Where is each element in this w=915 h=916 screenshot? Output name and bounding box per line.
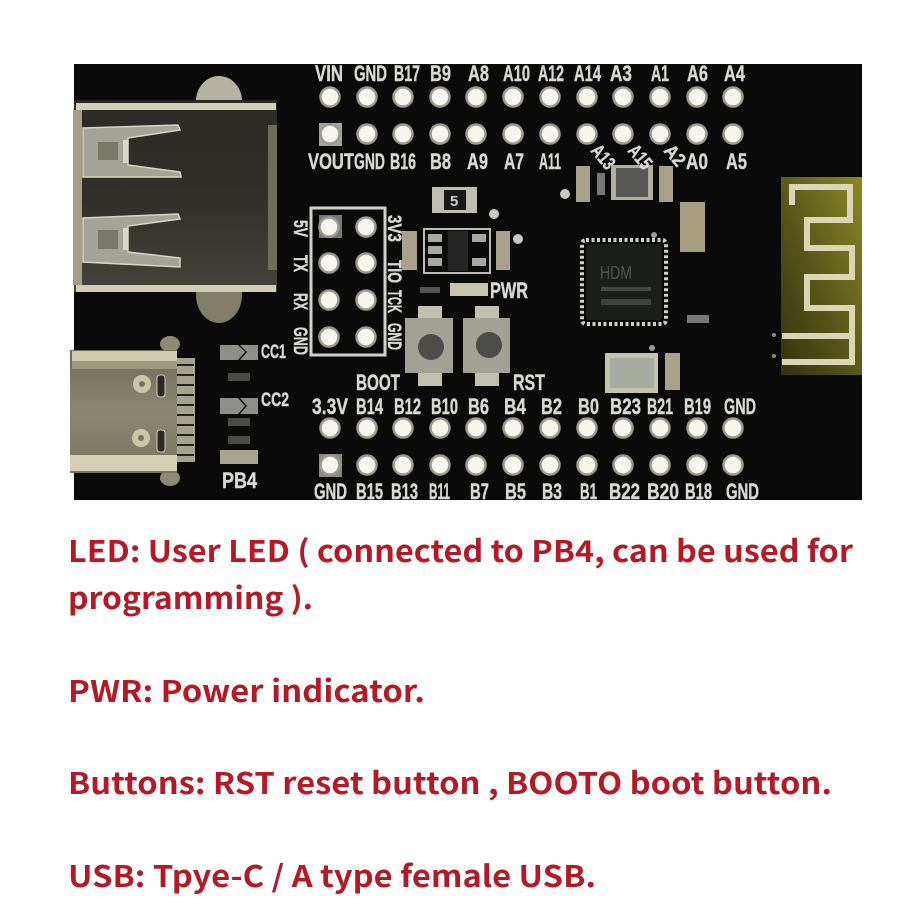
pin labels: 3V3 <box>383 215 404 242</box>
pin labels: B7 <box>470 479 489 504</box>
pin labels: GND <box>314 479 347 504</box>
circuit board <box>70 61 862 504</box>
USB A connector <box>73 76 277 323</box>
microcontroller <box>582 240 666 324</box>
antenna <box>772 177 862 375</box>
LED note: LED: User LED ( connected to PB4, can be used for <box>68 527 854 571</box>
header pin holes: top and bottom rows <box>319 88 742 477</box>
pin labels: RST <box>513 370 545 395</box>
pin labels: A7 <box>504 149 524 174</box>
pin labels: B16 <box>390 149 416 174</box>
board background <box>74 64 862 500</box>
pin labels: B18 <box>685 479 712 504</box>
pin labels: B21 <box>647 394 673 419</box>
pin labels: B6 <box>468 394 489 419</box>
pin labels: VIN <box>315 61 343 86</box>
pin labels: A9 <box>467 149 488 174</box>
pin labels: B2 <box>541 394 562 419</box>
microcontroller: HDM <box>600 263 632 283</box>
pin labels: VOUT <box>308 149 354 174</box>
header pins <box>319 215 376 346</box>
pin labels: A0 <box>686 149 708 174</box>
pin labels: PWR <box>490 278 528 303</box>
pin labels: B13 <box>391 479 418 504</box>
pin labels: A4 <box>724 61 746 86</box>
header outline <box>311 208 385 355</box>
pin labels: A2 <box>659 141 689 171</box>
pin labels: B0 <box>578 394 599 419</box>
pin labels: B23 <box>610 394 641 419</box>
pin labels: GND <box>383 323 404 350</box>
pin labels: A11 <box>539 149 561 174</box>
pin labels: TX <box>289 255 310 272</box>
USB note: USB: Tpye-C / A type female USB. <box>68 852 596 896</box>
pin labels: BOOT <box>356 370 400 395</box>
BOOT button <box>405 306 453 386</box>
pin labels: B14 <box>356 394 384 419</box>
pin labels: 5V <box>289 220 310 237</box>
regulator and resistors <box>402 187 510 296</box>
pin labels: B5 <box>505 479 526 504</box>
LED note <box>68 527 854 618</box>
pin labels: B15 <box>356 479 383 504</box>
pin labels: A15 <box>623 141 656 174</box>
PWR note: PWR: Power indicator. <box>68 667 425 711</box>
pin labels <box>222 61 759 504</box>
pin labels: GND <box>354 61 387 86</box>
pin labels: CC2 <box>261 390 289 411</box>
pin labels: A3 <box>610 61 632 86</box>
pin labels: B12 <box>394 394 421 419</box>
pin labels: A6 <box>687 61 708 86</box>
pin labels: A1 <box>651 61 669 86</box>
pin labels: B20 <box>647 479 679 504</box>
pin labels: CC1 <box>261 342 286 363</box>
buttons note: Buttons: RST reset button , BOOTO boot button. <box>68 759 832 803</box>
pin labels: GND <box>726 479 759 504</box>
pin labels: GND <box>289 327 310 355</box>
pin labels: B3 <box>542 479 562 504</box>
CC and PB4 LEDs <box>220 345 258 464</box>
small chip and crystals <box>489 165 709 393</box>
pin labels: B17 <box>394 61 420 86</box>
pin labels: RX <box>289 293 310 310</box>
pin labels: A13 <box>586 141 619 174</box>
pin labels: A5 <box>726 149 747 174</box>
RST button <box>463 306 510 386</box>
regulator and resistors: 5 <box>450 193 458 210</box>
pin labels: B22 <box>609 479 640 504</box>
pin labels: TIO <box>383 260 404 283</box>
pin labels: A8 <box>468 61 489 86</box>
pin labels: B1 <box>580 479 597 504</box>
pin labels: B8 <box>430 149 451 174</box>
pin labels: 3.3V <box>312 394 348 419</box>
LED note: programming ). <box>68 574 313 618</box>
pin labels: GND <box>354 149 385 174</box>
pin labels: A10 <box>503 61 530 86</box>
pin labels: B10 <box>431 394 458 419</box>
pin labels: A14 <box>574 61 602 86</box>
pin labels: B4 <box>504 394 527 419</box>
pin labels: B11 <box>429 479 450 504</box>
pin labels: A12 <box>538 61 564 86</box>
USB C connector <box>70 336 195 486</box>
pin labels: B19 <box>684 394 711 419</box>
pin labels: GND <box>724 394 756 419</box>
pin labels: TCK <box>383 290 404 313</box>
pin labels: PB4 <box>222 468 258 493</box>
pin labels: B9 <box>430 61 451 86</box>
